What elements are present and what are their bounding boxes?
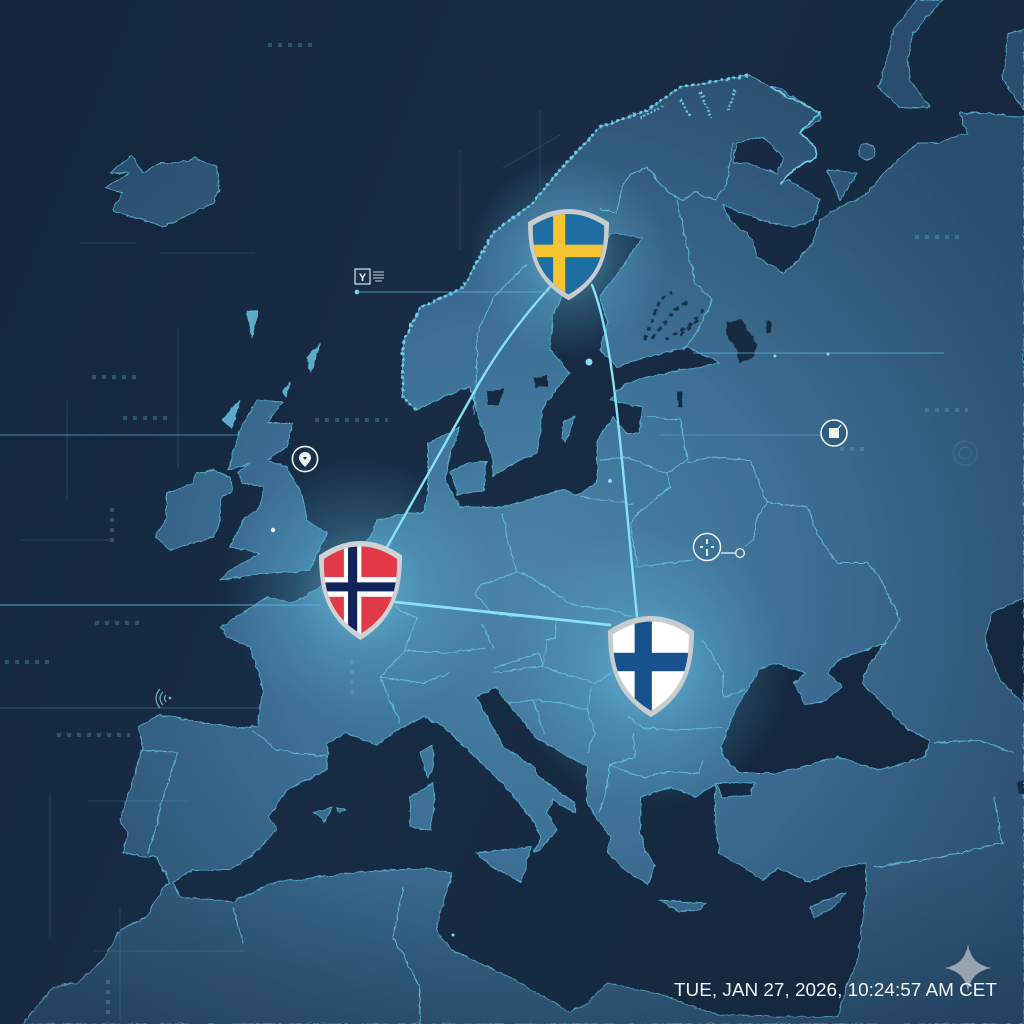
line: Norway to Finland: [395, 602, 610, 625]
land: Gotland: [562, 416, 575, 442]
country borders: [142, 143, 1013, 1024]
land: Cyprus: [810, 892, 846, 918]
icon: crosshair with node: [694, 534, 744, 560]
land: Great Britain: [220, 400, 327, 580]
south shading over Africa: [23, 840, 1024, 1024]
land: Faroe islands: [247, 310, 258, 337]
land: Balearic islands: [313, 807, 345, 822]
connection lines between shields: [387, 285, 637, 625]
land: north-east corner: [1003, 30, 1024, 110]
icon: sparkle watermark: [944, 944, 992, 992]
land: Kolguev: [859, 144, 875, 160]
coast highlight: Norway and Arctic: [403, 75, 820, 410]
line: Sweden to Finland: [592, 285, 637, 616]
shield: Finland: [608, 616, 694, 717]
icon: map pin: [292, 446, 318, 472]
land: Shetland: [307, 343, 320, 373]
line: Sweden to Norway: [387, 287, 550, 547]
timestamp: TUE, JAN 27, 2026, 10:24:57 AM CET: [674, 979, 997, 1000]
land: Novaya Zemlya: [878, 0, 943, 108]
land: Sicily: [476, 847, 531, 882]
small map nodes: [271, 352, 830, 936]
lakes: [487, 320, 1024, 795]
shield glows: [225, 158, 790, 808]
icon: scroll: [821, 420, 847, 446]
shield: Norway: [319, 541, 402, 640]
lakes: Finnish lake district: [645, 292, 703, 340]
land: Ireland: [155, 470, 233, 550]
land: Corsica: [420, 745, 434, 778]
icon: Y tag with line: [355, 269, 550, 294]
land: Crete: [659, 900, 707, 912]
land: Danish isles: [450, 462, 486, 495]
land: Kanin island: [827, 170, 857, 200]
land: Sardinia: [410, 783, 435, 830]
icon: signal arcs: [156, 689, 171, 708]
shield: Sweden: [528, 209, 609, 300]
icon: faint target ring: [953, 441, 977, 465]
land: Orkney: [282, 383, 290, 398]
land: Iceland: [105, 155, 220, 227]
icon: Y tag with line: Y: [359, 272, 367, 284]
land: Hebrides: [222, 400, 240, 428]
